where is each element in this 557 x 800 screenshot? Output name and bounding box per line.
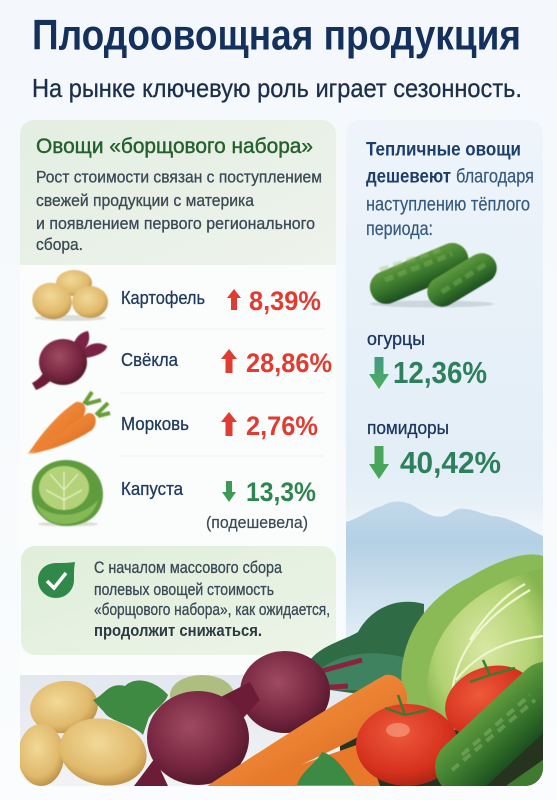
panel heading: Овощи «борщового набора» [36, 135, 313, 158]
label: cucumbers: огурцы [367, 328, 425, 349]
value: cucumbers: 12,36% [393, 355, 487, 390]
dark leaves [310, 602, 424, 700]
row: beet label: Свёкла [121, 350, 179, 370]
panel heading: благодаря [456, 166, 534, 188]
panel description: сбора. [36, 235, 83, 254]
arrow down: cabbage [222, 481, 236, 502]
arrow down: tomatoes [369, 446, 389, 479]
panel: greenhouse vegetables [346, 120, 543, 700]
tomatoes [356, 660, 523, 786]
value: potato: 8,39% [249, 286, 321, 316]
big cabbage [401, 554, 543, 730]
icon: cucumbers [365, 238, 502, 312]
callout [21, 546, 336, 655]
arrow up: carrot [221, 412, 237, 436]
green leaves [93, 680, 168, 735]
panel heading: Тепличные овощи [366, 138, 521, 160]
panel heading: наступлению тёплого [366, 194, 530, 216]
value: carrot: 2,76% [246, 411, 318, 441]
beets [134, 651, 362, 786]
subtitle: На рынке ключевую роль играет сезонность. [32, 73, 522, 103]
panel header background [20, 120, 336, 265]
panel description: Рост стоимости связан с поступлением [36, 168, 322, 186]
mountains backdrop [346, 502, 543, 700]
callout text: полевых овощей стоимость [94, 580, 274, 599]
potatoes [20, 680, 147, 786]
panel description: свежей продукции с материка [36, 191, 254, 210]
row: cabbage label: Капуста [121, 479, 184, 499]
icon: cabbage [32, 460, 103, 526]
callout text: «борщового набора», как ожидается, [94, 600, 330, 619]
value: tomatoes: 40,42% [400, 445, 501, 480]
label: tomatoes: помидоры [367, 417, 449, 438]
row: potato label: Картофель [121, 288, 205, 308]
icon: beet [32, 331, 107, 390]
icon: potatoes [27, 270, 108, 325]
carrots [207, 675, 407, 786]
row: carrot label: Морковь [121, 414, 189, 434]
bottom vegetables photo [18, 554, 557, 800]
panel heading: дешевеют [366, 166, 451, 188]
panel heading: периода: [366, 218, 433, 240]
value: beet: 28,86% [246, 348, 332, 378]
icon: check mark [38, 562, 75, 598]
herb sprig [297, 752, 355, 785]
arrow down: cucumbers [369, 357, 389, 389]
panel heading [366, 138, 534, 240]
callout text [94, 558, 330, 640]
callout text: С началом массового сбора [94, 558, 282, 577]
arrow up: beet [221, 349, 237, 373]
small cabbage [170, 675, 234, 698]
arrow up: potato [227, 289, 241, 310]
callout text: продолжит снижаться. [94, 621, 262, 640]
icon: carrots [28, 392, 110, 454]
panel description: и появлением первого регионального [36, 214, 315, 233]
cucumbers [435, 662, 543, 786]
value: cabbage: 13,3% [246, 477, 316, 507]
dark shadow behind vegetables [340, 730, 543, 786]
panel description [36, 168, 322, 254]
note: cabbage got cheaper: (подешевела) [206, 513, 308, 532]
panel: borscht set vegetables [20, 120, 336, 675]
